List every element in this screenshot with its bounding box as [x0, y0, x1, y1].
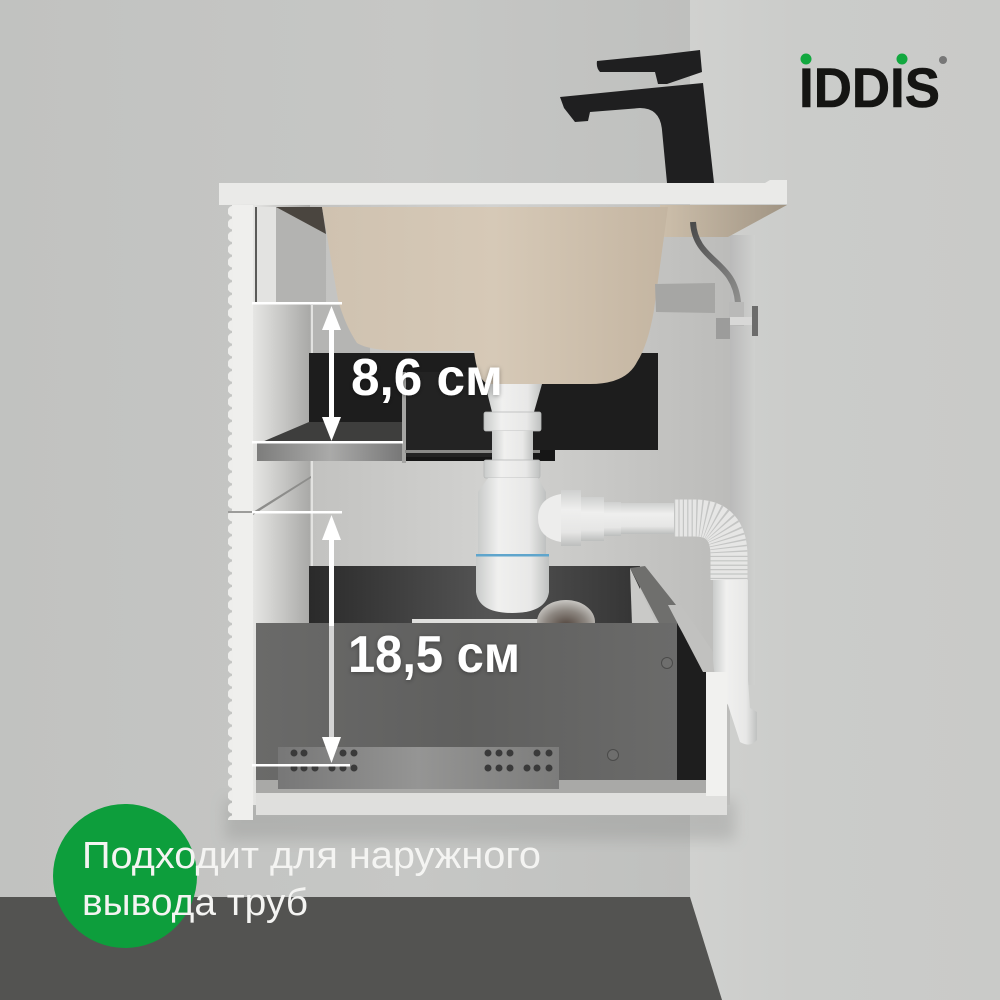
outlet pipe: [713, 580, 757, 745]
side drain pipe: [538, 490, 675, 546]
floor: [0, 897, 722, 1000]
faucet: [560, 50, 714, 183]
dimension: 18,5 cm: 18,5 см: [348, 626, 520, 684]
sink bowl: [322, 207, 668, 384]
callout: external pipe outlet: Подходит для наружного: [82, 835, 541, 877]
cabinet right panel: [706, 672, 727, 796]
cabinet interior: [253, 205, 755, 805]
wall bracket: [655, 283, 715, 313]
countertop: [219, 180, 787, 205]
cabinet floor shadow: [256, 780, 706, 794]
right wall: [690, 0, 1000, 1000]
left wall: [0, 0, 692, 900]
drawer back: [309, 566, 640, 626]
drawer rail: [278, 747, 559, 789]
callout: external pipe outlet: [53, 804, 541, 948]
drawer front: [256, 623, 677, 780]
shut-off valve: [716, 302, 758, 339]
siphon: [476, 384, 549, 613]
dimension: 8,6 cm: [252, 302, 503, 444]
callout: external pipe outlet: вывода труб: [82, 882, 308, 924]
corrugated elbow: [674, 518, 729, 580]
grey tray: [257, 372, 540, 463]
black back shelf: [309, 353, 658, 461]
drain ball: [537, 600, 595, 644]
hose: [693, 222, 738, 303]
logo: IDDIS: [799, 56, 940, 119]
cabinet bottom panel: [256, 793, 727, 815]
drawer screws: [608, 658, 672, 760]
cabinet shadow on wall: [225, 800, 735, 840]
countertop underside: [660, 205, 787, 237]
dimension: 18,5 cm: [252, 511, 520, 766]
white cabinet side: [228, 205, 253, 820]
dimension: 8,6 cm: 8,6 см: [351, 349, 503, 407]
drawer side strips: [630, 566, 727, 782]
drain plate: [412, 619, 570, 624]
